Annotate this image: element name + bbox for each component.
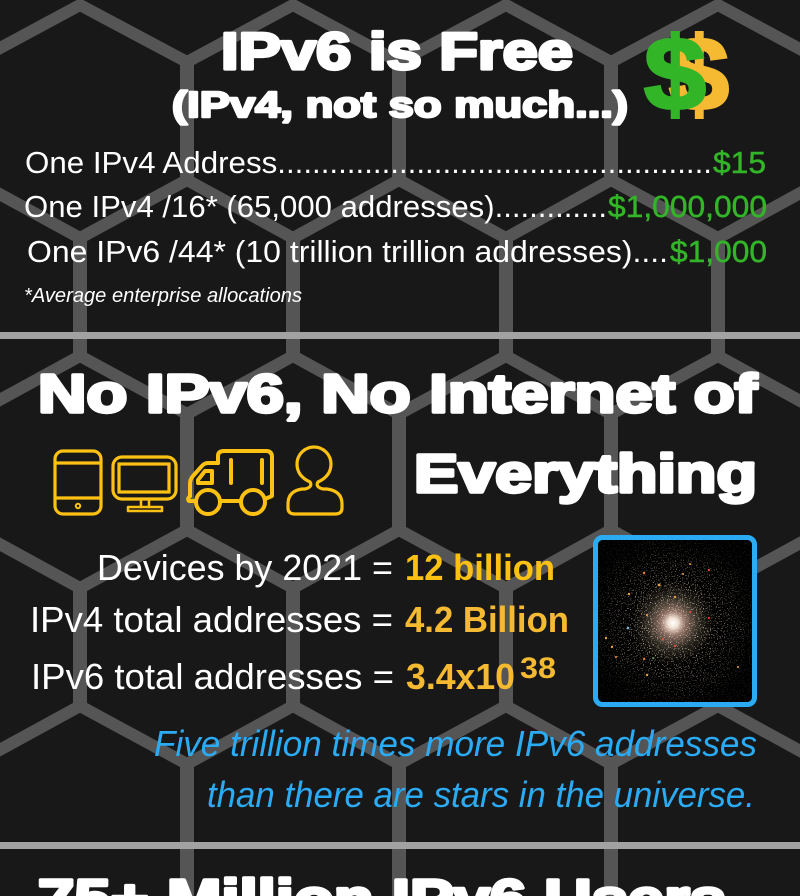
price line: one IPv4 address: One IPv4 Address.................................................. bbox=[25, 145, 712, 180]
callout: five trillion times: than there are stars in the universe. bbox=[207, 774, 755, 815]
image: star cluster bbox=[596, 538, 754, 704]
heading: Everything bbox=[414, 444, 757, 504]
stat: IPv4 total addresses: 4.2 Billion bbox=[405, 599, 569, 640]
icon: dollar signs bbox=[644, 17, 729, 133]
footnote: *Average enterprise allocations bbox=[24, 285, 302, 307]
price line: IPv4 /16: One IPv4 /16* (65,000 addresses)............. bbox=[24, 189, 607, 224]
callout: five trillion times: Five trillion times more IPv6 addresses bbox=[154, 723, 757, 764]
stat: IPv4 total addresses: IPv4 total addresses = bbox=[30, 599, 393, 640]
panel: IPv6 is free bbox=[24, 17, 767, 307]
stat: devices by 2021: Devices by 2021 = bbox=[97, 547, 393, 588]
icon: dollar signs: $ bbox=[669, 17, 729, 133]
price line: IPv4 /16: $1,000,000 bbox=[608, 189, 767, 224]
icon: monitor bbox=[113, 457, 176, 511]
divider bbox=[0, 842, 800, 849]
title: IPv6 is Free bbox=[221, 23, 573, 81]
icon: truck bbox=[188, 451, 272, 514]
stat: devices by 2021 bbox=[97, 547, 555, 588]
icon: person bbox=[288, 447, 342, 514]
stat: devices by 2021: 12 billion bbox=[405, 547, 555, 588]
icon: dollar signs: $ bbox=[644, 17, 706, 133]
heading: No IPv6, No Internet of bbox=[38, 364, 758, 424]
stat: IPv6 total addresses: 38 bbox=[520, 652, 556, 685]
subtitle: (IPv4, not so much...) bbox=[172, 84, 628, 125]
divider bbox=[0, 332, 800, 339]
price line: IPv6 /44: One IPv6 /44* (10 trillion trillion addresses).... bbox=[27, 234, 668, 269]
icon: tablet bbox=[55, 451, 101, 514]
callout: five trillion times bbox=[154, 723, 757, 815]
heading bbox=[38, 364, 758, 504]
price line: one IPv4 address: $15 bbox=[713, 145, 766, 180]
stat: IPv6 total addresses: IPv6 total addresses = bbox=[31, 656, 394, 697]
price line: IPv6 /44: $1,000 bbox=[670, 234, 767, 269]
stat: IPv6 total addresses bbox=[31, 652, 556, 697]
panel: no IPv6, no internet of everything bbox=[30, 364, 758, 815]
stat: IPv4 total addresses bbox=[30, 599, 569, 640]
stat: IPv6 total addresses: 3.4x10 bbox=[406, 656, 515, 697]
